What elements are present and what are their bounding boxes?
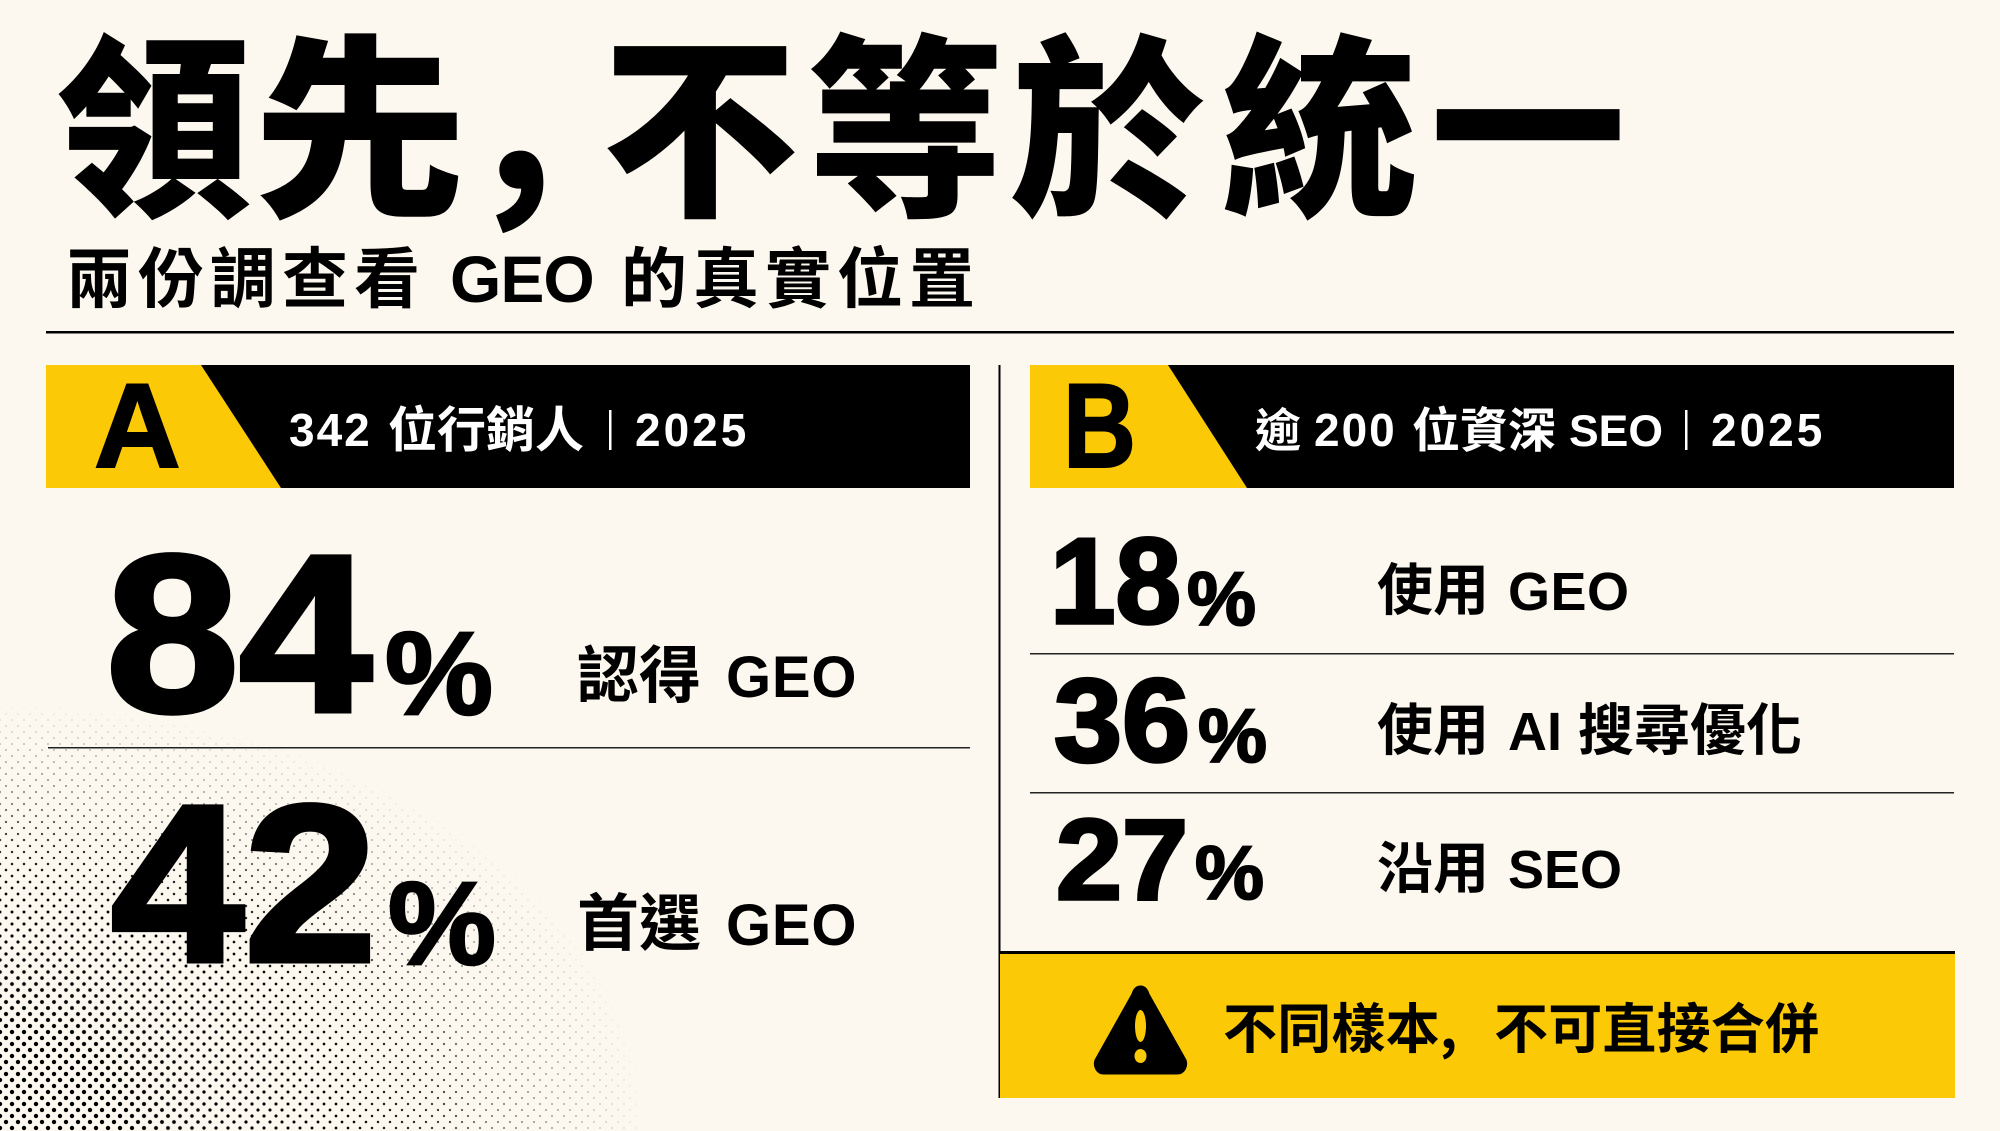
header: survey B: 位資深 bbox=[1412, 391, 1556, 461]
header: survey B bbox=[1030, 359, 1954, 493]
icon: warning triangle bbox=[1094, 986, 1187, 1074]
stat: 42% prefer GEO bbox=[111, 759, 857, 1009]
stat: 27% stick with SEO bbox=[1056, 797, 1622, 924]
stat: 18% use GEO: GEO bbox=[1508, 562, 1630, 622]
stat: 84% recognise GEO: GEO bbox=[726, 645, 857, 710]
stat: 18% use GEO: 使用 bbox=[1377, 546, 1489, 627]
stat: 42% prefer GEO: % bbox=[388, 858, 496, 990]
stat: 84% recognise GEO: 84 bbox=[106, 509, 372, 759]
panel: survey B bbox=[1030, 359, 1954, 924]
title bbox=[56, 0, 1626, 258]
stat: 84% recognise GEO bbox=[106, 509, 857, 759]
header: survey A bbox=[46, 359, 970, 493]
header: survey B: SEO bbox=[1569, 407, 1663, 456]
header: survey A: A bbox=[94, 359, 181, 493]
header: survey B: 逾 bbox=[1255, 395, 1301, 461]
stat: 42% prefer GEO: 首選 bbox=[577, 873, 701, 963]
stat: 84% recognise GEO: % bbox=[385, 608, 493, 740]
subtitle bbox=[66, 226, 981, 322]
stat: 36% use AI search optimisation: 使用 bbox=[1377, 686, 1489, 767]
stat: 42% prefer GEO: 42 bbox=[111, 759, 377, 1009]
stat: 36% use AI search optimisation bbox=[1054, 655, 1802, 787]
stat: 27% stick with SEO: % bbox=[1195, 831, 1264, 916]
stat: 36% use AI search optimisation: AI bbox=[1508, 702, 1562, 762]
stat: 36% use AI search optimisation: 36 bbox=[1054, 655, 1190, 787]
stat: 18% use GEO bbox=[1050, 513, 1630, 649]
stat: 36% use AI search optimisation: 搜尋優化 bbox=[1578, 686, 1802, 767]
header: survey A: 342 bbox=[289, 404, 372, 456]
header: survey A: 位行銷人 bbox=[388, 391, 584, 462]
stat: 27% stick with SEO: SEO bbox=[1508, 840, 1622, 900]
header: survey B: 2025 bbox=[1711, 404, 1825, 456]
stat: 18% use GEO: 18 bbox=[1050, 513, 1181, 649]
subtitle: 兩份調查看 bbox=[66, 226, 426, 322]
subtitle: GEO bbox=[450, 242, 594, 316]
header: survey B: B bbox=[1063, 359, 1136, 493]
stat: 42% prefer GEO: GEO bbox=[726, 893, 857, 958]
callout: warning bbox=[1000, 951, 1955, 1098]
stat: 27% stick with SEO: 沿用 bbox=[1377, 824, 1489, 905]
panel: survey A bbox=[46, 359, 970, 1009]
stat: 27% stick with SEO: 27 bbox=[1056, 797, 1188, 924]
stat: 84% recognise GEO: 認得 bbox=[577, 625, 701, 715]
header: survey B: 200 bbox=[1314, 404, 1397, 456]
callout: warning: 不同樣本, 不可直接合併 bbox=[1223, 985, 1819, 1064]
header: survey A: 2025 bbox=[635, 404, 749, 456]
subtitle: 的真實位置 bbox=[621, 226, 981, 322]
stat: 18% use GEO: % bbox=[1187, 557, 1256, 642]
stat: 36% use AI search optimisation: % bbox=[1198, 694, 1267, 779]
